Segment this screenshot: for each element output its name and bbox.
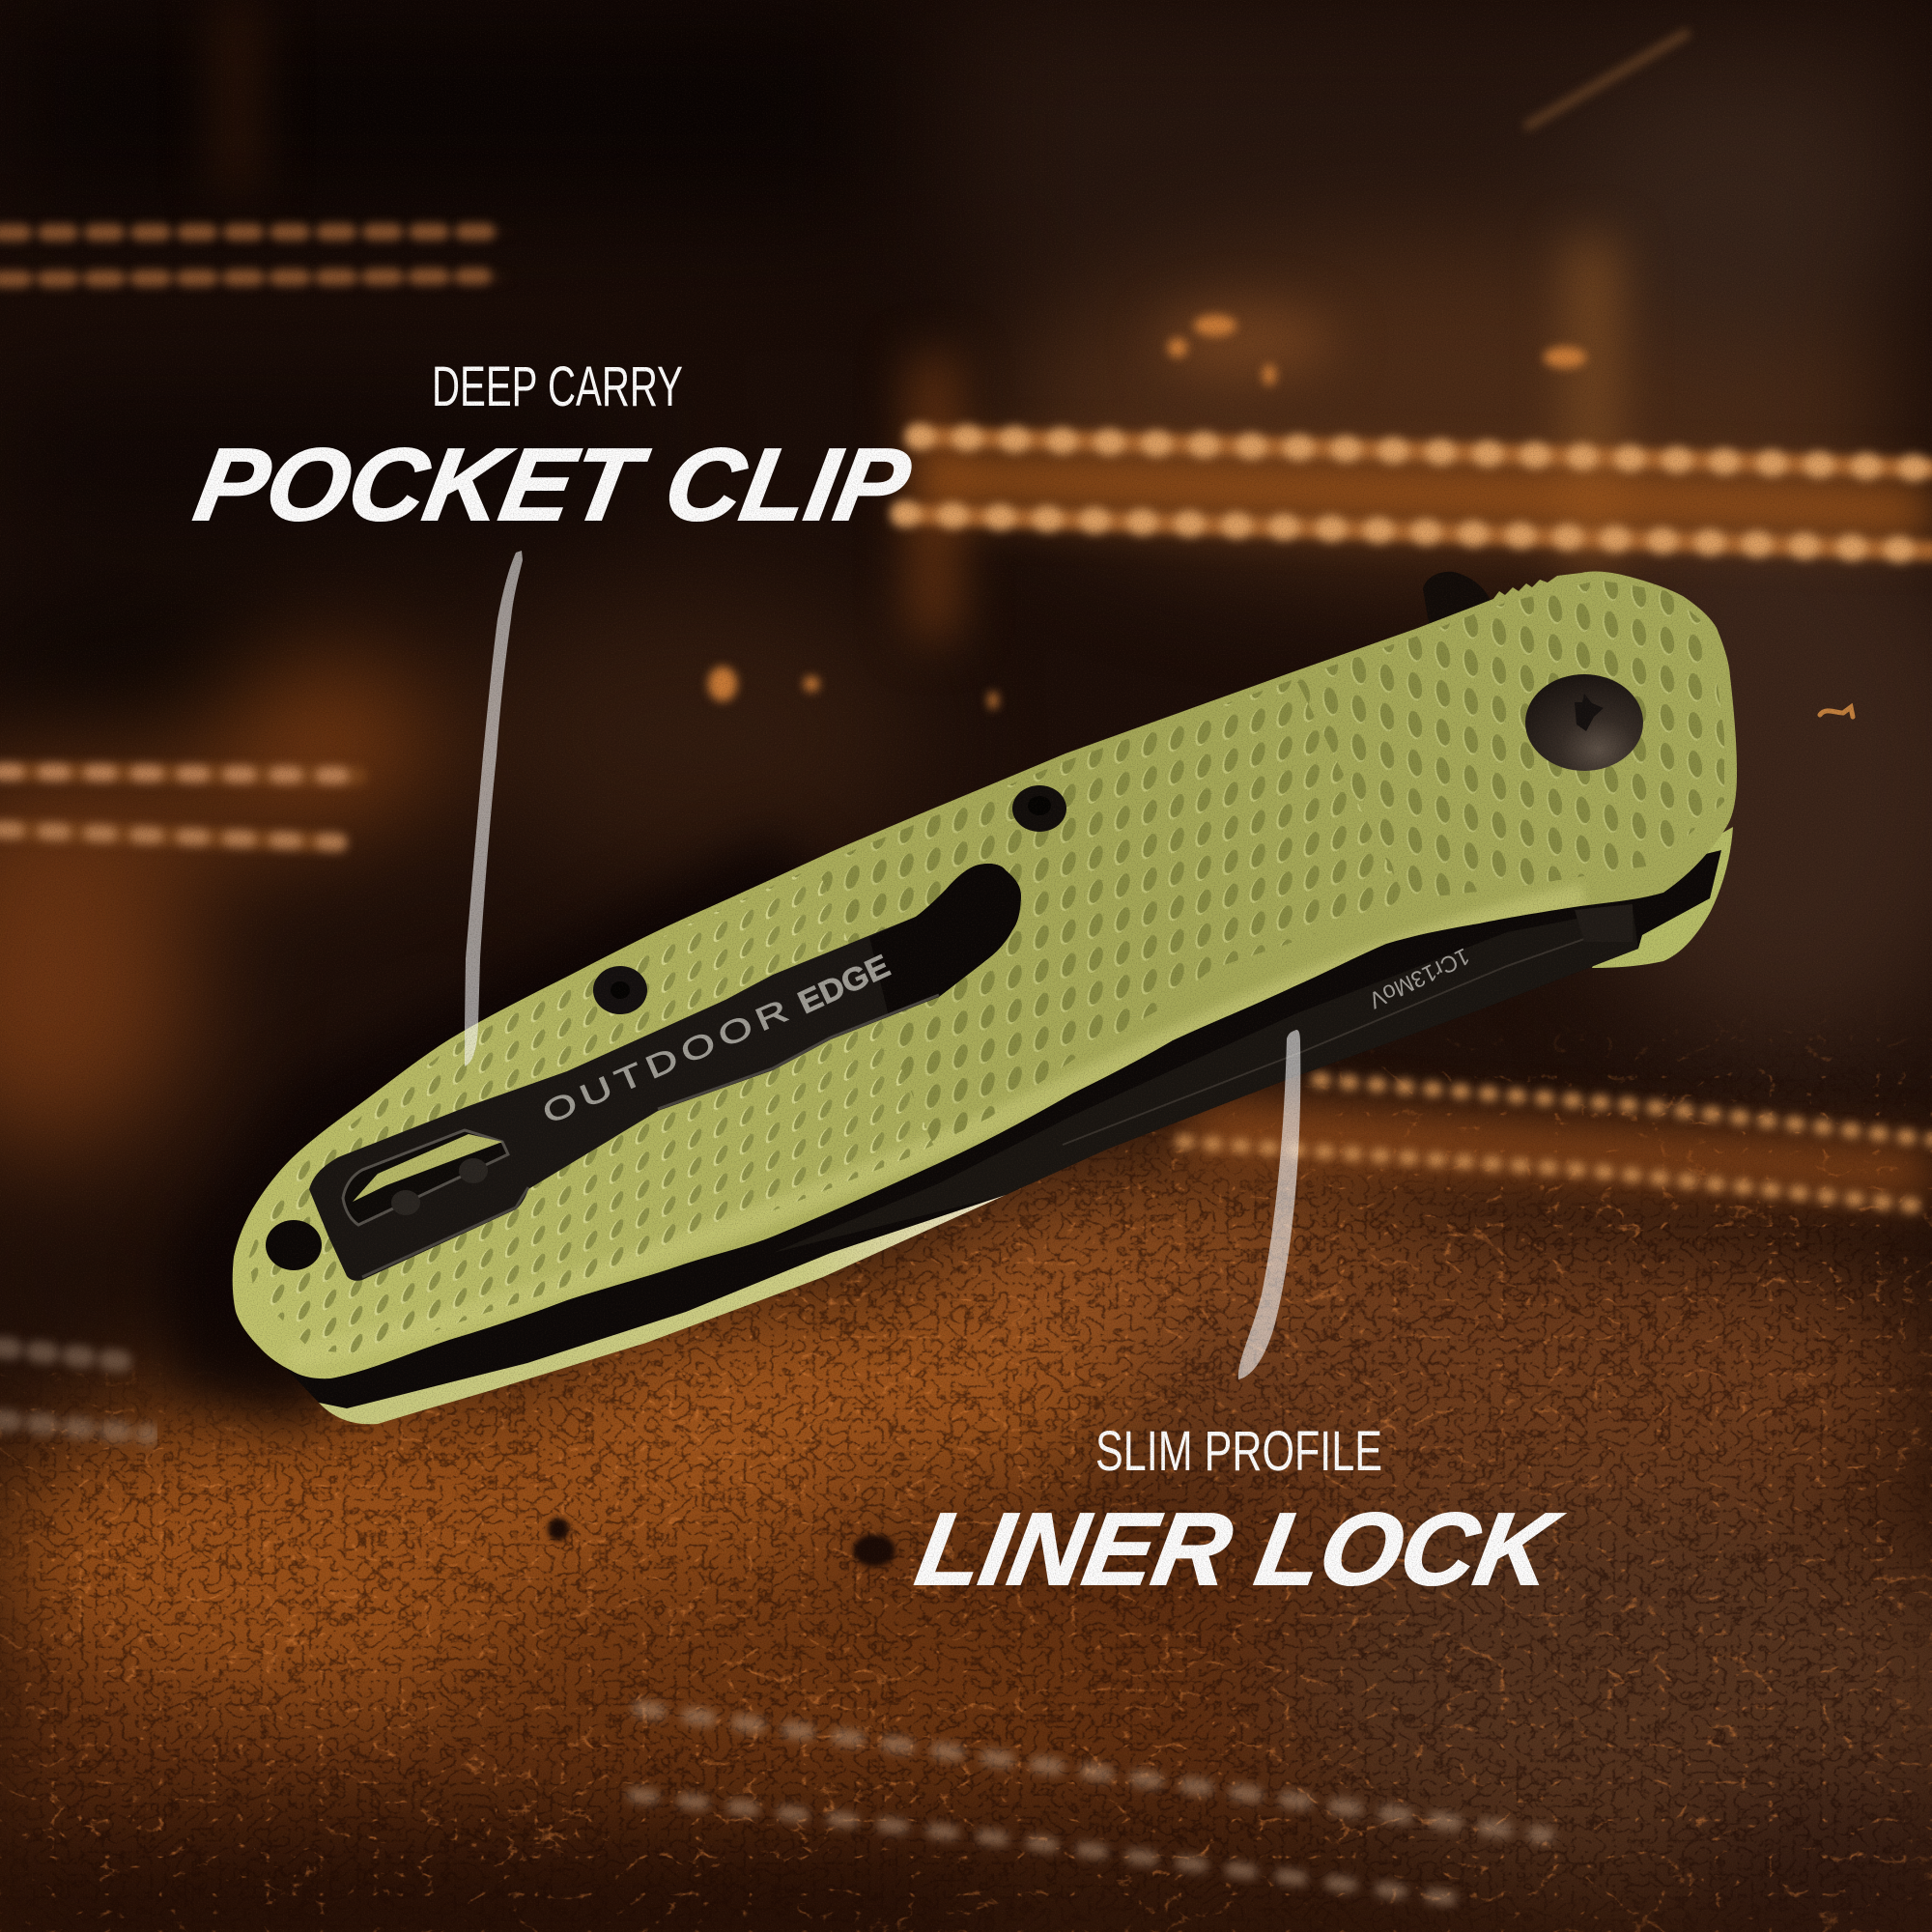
callout line: pocket clip [465,551,523,1066]
knife shadow [164,831,869,1430]
handle lower rim light [290,896,1584,1357]
clip logo text: OUTDOOR [537,989,799,1130]
handle grip dimples [222,541,1758,1381]
orange flecks [708,315,1586,709]
clip logo text: EDGE [792,948,895,1020]
stitches: bottom [635,1709,1546,1898]
callout line: liner lock [1238,1030,1300,1379]
faint scratch upper right [1528,34,1686,126]
handle scale [232,572,1737,1379]
stitches: centre right [903,437,1932,551]
clip hook darker end [869,864,1021,1016]
heading: liner lock: LINER LOCK [909,1492,1569,1606]
label: slim profile: SLIM PROFILE [1095,1420,1382,1483]
orange scuff on the right [1820,707,1853,717]
handle visible through slot [353,1134,502,1202]
heading: pocket clip: POCKET CLIP [187,427,919,542]
blade bevel line [1063,925,1623,1145]
thumb stud behind handle [1423,572,1492,628]
clip lower bevel [362,995,939,1277]
stitches: lower left [0,1348,150,1435]
clip logo text [537,948,895,1130]
blade tang highlight [1575,904,1633,942]
rear scale under the liner [1592,827,1733,968]
handle screw upper [1012,785,1066,832]
clip slot frame [343,1130,508,1225]
blade steel marking: 1Cr13MoV [1365,943,1473,1013]
leather crackle cells [0,1126,1932,1924]
label: deep carry: DEEP CARRY [432,355,683,418]
dark scuffs on leather [548,1518,895,1567]
stitches: lower right [1182,1080,1932,1208]
lanyard hole [266,1220,322,1270]
pocket clip [309,864,1021,1281]
stitches: upper left [0,232,493,279]
stitches: top edge [1005,0,1710,10]
stitches: left middle [0,772,357,842]
handle screw lower [593,966,647,1014]
screws seen through the clip slot [391,1158,488,1215]
blurred leather creases and glow around stitching [217,0,1932,1198]
leather light veins [0,1020,1932,1932]
knife [193,541,1758,1424]
black liner [275,850,1721,1408]
lower scale [290,1150,1006,1424]
pivot screw [1525,674,1643,771]
blade body [773,908,1638,1253]
